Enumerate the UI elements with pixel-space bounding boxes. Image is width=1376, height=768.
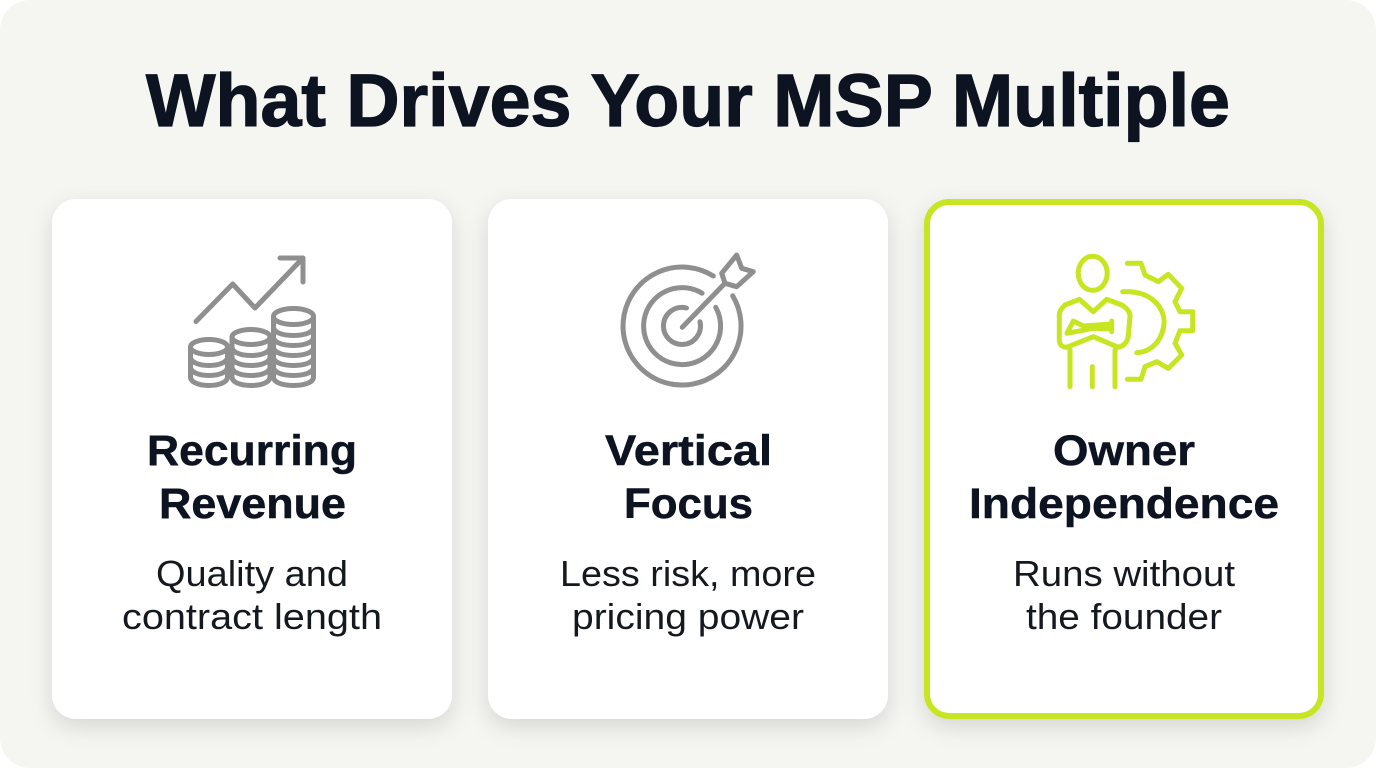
icon: target with arrow: [623, 255, 753, 385]
heading: recurring revenue: Recurring: [147, 427, 357, 475]
heading: owner independence: Independence: [969, 480, 1279, 528]
heading: vertical focus: Focus: [624, 480, 753, 528]
description: vertical focus: [560, 553, 816, 637]
description: vertical focus: Less risk, more: [560, 553, 816, 594]
heading: recurring revenue: [147, 427, 357, 528]
heading: recurring revenue: Revenue: [159, 480, 346, 528]
card background: vertical focus: [488, 199, 888, 719]
description: recurring revenue: contract length: [122, 596, 382, 637]
title: What Drives Your MSP Multiple: [146, 59, 1230, 142]
description: recurring revenue: Quality and: [156, 553, 348, 594]
description: owner independence: the founder: [1026, 596, 1222, 637]
icon: rising arrow over coin stacks: [190, 258, 314, 386]
heading: vertical focus: Vertical: [605, 427, 772, 475]
card background: recurring revenue: [52, 199, 452, 719]
description: vertical focus: pricing power: [572, 596, 804, 637]
panel: owner independence (highlighted): [927, 202, 1321, 716]
icon: person with gear: [1059, 256, 1193, 387]
description: owner independence: [1013, 553, 1235, 637]
panel: vertical focus: [488, 199, 888, 719]
heading: owner independence: [969, 427, 1279, 528]
heading: owner independence: Owner: [1053, 427, 1195, 475]
card background: owner independence: [927, 202, 1321, 716]
panel: recurring revenue: [52, 199, 452, 719]
heading: vertical focus: [605, 427, 772, 528]
description: recurring revenue: [122, 553, 382, 637]
description: owner independence: Runs without: [1013, 553, 1235, 594]
